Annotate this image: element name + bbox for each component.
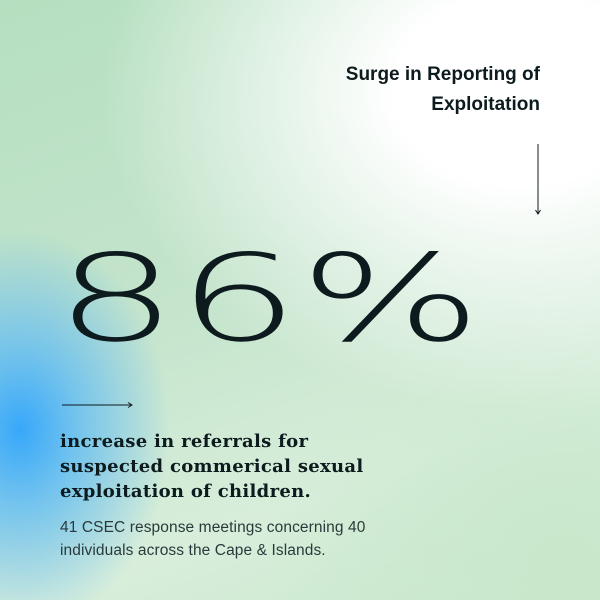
title: Surge in Reporting of xyxy=(346,64,540,85)
arrow: vertical xyxy=(535,144,541,215)
title: Exploitation xyxy=(431,94,540,115)
headline text xyxy=(60,431,364,502)
body text xyxy=(60,519,365,559)
headline text: increase in referrals for xyxy=(60,431,308,452)
body text: 41 CSEC response meetings concerning 40 xyxy=(60,519,365,536)
title xyxy=(346,64,540,115)
body text: individuals across the Cape & Islands. xyxy=(60,542,326,559)
big number: 86% xyxy=(55,228,482,368)
headline text: suspected commerical sexual xyxy=(60,456,364,477)
headline text: exploitation of children. xyxy=(60,481,311,502)
arrow: horizontal xyxy=(62,402,133,408)
